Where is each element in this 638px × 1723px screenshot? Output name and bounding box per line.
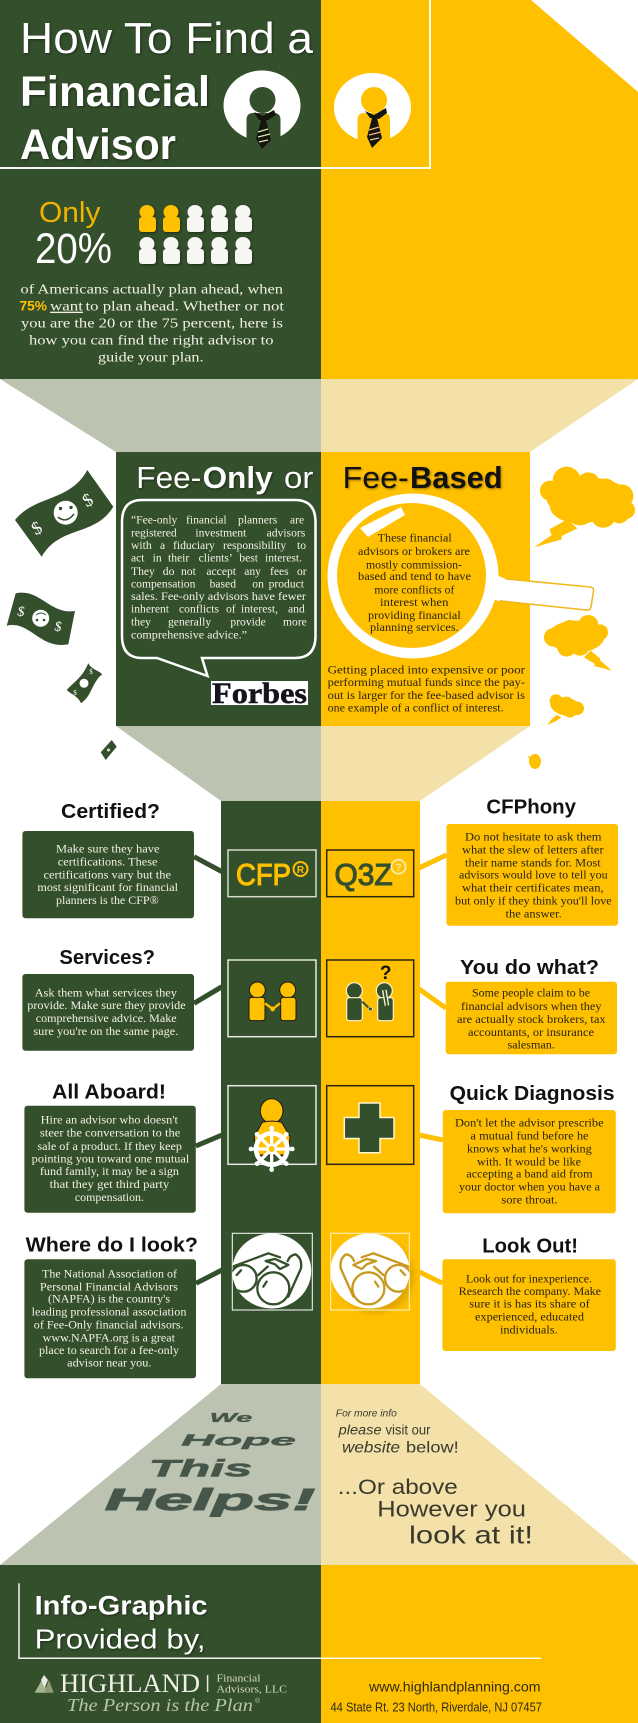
speech bubble with quote: interest, xyxy=(241,603,278,616)
text block: intro paragraph: 75% xyxy=(20,299,47,314)
speech bubble with quote: in xyxy=(153,552,162,565)
callout: look out: sure it is has its share of xyxy=(469,1298,590,1311)
speech bubble with quote: of xyxy=(226,603,236,616)
speech bubble with quote: sales. Fee-only advisors have fewer xyxy=(131,590,306,603)
speech bubble with quote: fees xyxy=(270,565,289,578)
speech bubble with quote: with xyxy=(131,539,152,552)
icon: confused client and advisor: ? xyxy=(380,963,392,984)
heading: certified: Certified? xyxy=(61,800,160,823)
speech bubble with quote xyxy=(122,500,316,676)
icon: binoculars on green xyxy=(230,1233,312,1310)
speech bubble with quote: more xyxy=(283,616,307,629)
icon: medium storm cloud xyxy=(544,615,612,671)
speech bubble with quote: responsibility xyxy=(223,539,286,552)
title: Advisor xyxy=(20,121,176,169)
callout: you do what: accountants, or insurance xyxy=(468,1026,594,1039)
speech bubble with quote: based xyxy=(210,578,236,591)
callout: look out: experienced, educated xyxy=(475,1311,584,1324)
speech bubble with quote: financial xyxy=(186,513,227,526)
speech bubble with quote: conflicts xyxy=(179,603,219,616)
panel: central column xyxy=(221,801,420,1384)
icon: person at ship's wheel xyxy=(228,1086,316,1172)
icon: large storm cloud xyxy=(534,467,635,547)
icon: Q3Z fake mark xyxy=(327,850,414,897)
icon: magnifying glass with definition: interest when xyxy=(380,596,449,609)
callout: services: Ask them what services they xyxy=(35,987,177,1000)
speech bubble with quote: and xyxy=(288,603,305,616)
speech bubble with quote: their xyxy=(168,552,189,565)
icon: medium money bill xyxy=(7,593,75,645)
callout: CFPhony xyxy=(419,824,618,926)
panel: fee-only vs fee-based xyxy=(116,452,530,726)
icon: CFP mark: CFP xyxy=(236,857,291,892)
text block: visit website: visit our xyxy=(386,1421,431,1437)
icon: magnifying glass with definition: more conflicts of xyxy=(374,583,455,596)
speech bubble with quote: act xyxy=(131,552,145,565)
text block: conflict of interest example: one example of a conflict of interest. xyxy=(328,702,504,715)
callout: where do I look: advisor near you. xyxy=(67,1357,152,1370)
icon: small money bill: $ xyxy=(73,689,77,697)
speech bubble with quote: accept xyxy=(206,565,237,578)
speech bubble with quote: inherent xyxy=(131,603,170,616)
speech bubble with quote: on xyxy=(252,578,264,591)
callout: CFPhony: advisors would love to tell you xyxy=(459,869,608,882)
text block: we hope this helps: This xyxy=(149,1456,252,1483)
callout: quick diagnosis: a mutual fund before he xyxy=(470,1129,588,1142)
callout: where do I look: place to search for a fee-only xyxy=(39,1344,179,1357)
funnel: middle connector xyxy=(116,726,530,801)
title: Financial xyxy=(20,68,210,116)
speech bubble with quote: are xyxy=(290,513,304,526)
text block: we hope this helps: Hope xyxy=(181,1433,296,1450)
icon: magnifying glass with definition: based and tend to have xyxy=(358,570,471,583)
text block: conflict of interest example: out is larger for the fee-based advisor is xyxy=(328,689,526,702)
icon: magnifying glass with definition xyxy=(328,494,594,658)
callout: where do I look: The National Association of xyxy=(42,1267,177,1280)
icon: magnifying glass with definition: advisors or brokers are xyxy=(358,545,470,558)
text block: visit website: For more info xyxy=(336,1409,397,1420)
text block: intro paragraph: guide your plan. xyxy=(98,350,204,365)
callout: look out xyxy=(419,1259,616,1351)
callout: services: comprehensive advice. Make xyxy=(36,1012,177,1025)
icon: magnifying glass with definition: mostly commission- xyxy=(366,558,462,571)
text block: visit website: website xyxy=(342,1440,400,1457)
callout: where do I look: www.NAPFA.org is a great xyxy=(43,1332,176,1345)
icon: Q3Z fake mark: Q3Z xyxy=(334,857,393,892)
icon: advisor silhouette on green xyxy=(224,70,300,150)
callout: CFPhony: what the slew of letters after xyxy=(462,844,604,857)
callout: you do what: salesman. xyxy=(508,1038,555,1051)
heading: quick diagnosis: Quick Diagnosis xyxy=(450,1082,615,1105)
heading: fee-based: Based xyxy=(410,460,503,495)
callout: CFPhony: but only if they think you'll love xyxy=(455,895,612,908)
icon: Q3Z fake mark: ? xyxy=(395,862,402,874)
callout: all aboard: Hire an advisor who doesn't xyxy=(41,1113,179,1126)
title xyxy=(20,14,314,169)
icon: small money bill: $ xyxy=(89,668,93,676)
icon: tiny money bill xyxy=(101,740,117,760)
speech bubble with quote: not xyxy=(181,565,197,578)
text block: intro paragraph: want xyxy=(50,299,83,314)
icon: tiny storm cloud xyxy=(527,754,541,769)
speech bubble with quote: “Fee-only xyxy=(131,513,178,526)
callout: you do what: are actually stock brokers, tax xyxy=(457,1013,606,1026)
speech bubble with quote: any xyxy=(244,565,261,578)
text block: we hope this helps: We xyxy=(210,1410,252,1425)
speech bubble with quote: investment xyxy=(195,527,247,540)
icon: binoculars on yellow xyxy=(330,1233,414,1313)
speech bubble with quote: best xyxy=(239,552,259,565)
icon: advisor silhouette on yellow xyxy=(334,73,411,150)
icon: large smiling money bill xyxy=(15,470,113,557)
tagline: ® xyxy=(255,1697,261,1705)
speech bubble with quote: interest. xyxy=(265,552,302,565)
heading: all aboard: All Aboard! xyxy=(52,1080,166,1103)
text block: visit website: please xyxy=(338,1421,382,1437)
contact: address: 44 State Rt. 23 North, Riverdale, NJ 07457 xyxy=(330,1701,542,1715)
icon: ten people, two highlighted xyxy=(139,205,252,264)
callout: where do I look: leading professional association xyxy=(32,1306,187,1319)
callout: certified: Make sure they have xyxy=(56,843,160,856)
heading: fee-based xyxy=(343,460,503,495)
callout: quick diagnosis: with. It would be like xyxy=(477,1155,581,1168)
logo: Highland Financial Advisors xyxy=(35,1669,287,1698)
callout: services: sure you're on the same page. xyxy=(33,1025,178,1038)
speech bubble with quote: registered xyxy=(131,527,177,540)
text block: visit website xyxy=(336,1409,459,1457)
callout: quick diagnosis xyxy=(419,1110,616,1213)
callout: all aboard xyxy=(24,1106,222,1213)
speech bubble with quote: product xyxy=(269,578,305,591)
icon: handshake xyxy=(228,960,316,1037)
heading: where do I look: Where do I look? xyxy=(26,1234,198,1257)
logo: Highland Financial Advisors: Advisors, LLC xyxy=(216,1684,287,1695)
callout: quick diagnosis: Don't let the advisor prescribe xyxy=(455,1117,604,1130)
speech bubble with quote: a xyxy=(160,539,165,552)
icon: medical cross xyxy=(327,1086,414,1164)
text block: conflict of interest example: performing mutual funds since the pay- xyxy=(328,676,525,689)
text block: we hope this helps: Helps! xyxy=(105,1482,315,1517)
callout: certified: most significant for financial xyxy=(37,881,178,894)
panel: footer background xyxy=(0,1565,638,1723)
text block: or above: However you xyxy=(377,1497,526,1522)
callout: quick diagnosis: sore throat. xyxy=(501,1194,558,1207)
heading: info-graphic provided by xyxy=(35,1590,208,1654)
icon: magnifying glass with definition: These financial xyxy=(378,532,452,545)
speech bubble with quote: or xyxy=(297,565,307,578)
panel: header background xyxy=(0,0,638,379)
heading: info-graphic provided by: Info-Graphic xyxy=(35,1590,208,1620)
speech bubble with quote: do xyxy=(163,565,175,578)
icon: confused client and advisor xyxy=(327,960,414,1037)
callout: where do I look xyxy=(24,1259,222,1378)
callout: certified: planners is the CFP® xyxy=(56,894,159,907)
speech bubble with quote: to xyxy=(297,539,306,552)
speech bubble with quote: advisors xyxy=(267,527,306,540)
heading: fee-only or: or xyxy=(284,460,313,495)
speech bubble with quote: generally xyxy=(168,616,211,629)
heading: fee-only or: Fee- xyxy=(136,460,201,495)
funnel: upper connector xyxy=(0,379,638,452)
speech bubble with quote: clients’ xyxy=(199,552,233,565)
text block: intro paragraph: how you can find the right advisor to xyxy=(29,333,274,348)
text block: or above: ...Or above xyxy=(338,1476,458,1499)
text block: conflict of interest example: Getting placed into expensive or poor xyxy=(328,663,525,676)
heading: info-graphic provided by: Provided by, xyxy=(35,1623,206,1654)
icon: small storm cloud xyxy=(547,694,584,725)
callout: where do I look: Personal Financial Advisors xyxy=(40,1280,178,1293)
callout: look out: individuals. xyxy=(500,1323,558,1336)
speech bubble with quote: fiduciary xyxy=(173,539,215,552)
callout: quick diagnosis: your doctor when you have a xyxy=(459,1181,600,1194)
heading: CFPhony: CFPhony xyxy=(486,795,577,818)
callout: certified: certifications. These xyxy=(58,856,157,869)
heading: fee-only or xyxy=(136,460,313,495)
icon: magnifying glass with definition: planning services. xyxy=(370,621,459,634)
text block: intro paragraph: to plan ahead. Whether or not xyxy=(86,299,284,314)
icon: medium money bill: $ xyxy=(16,604,26,621)
funnel: lower trapezoid xyxy=(0,1384,638,1565)
callout: CFPhony: what their certificates mean, xyxy=(462,882,604,895)
logo: Highland Financial Advisors: Financial xyxy=(216,1674,261,1685)
callout: look out: Research the company. Make xyxy=(459,1285,601,1298)
logo: Highland Financial Advisors: HIGHLAND xyxy=(60,1669,200,1698)
callout: look out: Look out for inexperience. xyxy=(466,1273,592,1286)
text block: intro paragraph: of Americans actually plan ahead, when xyxy=(20,281,283,296)
contact: website: www.highlandplanning.com xyxy=(368,1679,540,1695)
icon: large smiling money bill: $ xyxy=(28,517,46,539)
callout: certified: certifications vary but the xyxy=(44,869,171,882)
icon: small money bill xyxy=(67,663,102,703)
text block: visit website: below! xyxy=(406,1440,459,1457)
heading: fee-based: Fee- xyxy=(343,460,409,495)
speech bubble with quote: they xyxy=(131,616,151,629)
icon: magnifying glass with definition: providing financial xyxy=(368,609,461,622)
callout: all aboard: fund family, it may be a sign xyxy=(40,1165,179,1178)
callout: where do I look: of Fee-Only financial advisors. xyxy=(34,1319,184,1332)
callout: CFPhony: Do not hesitate to ask them xyxy=(465,831,602,844)
callout: you do what xyxy=(419,982,617,1054)
text block: conflict of interest example xyxy=(328,663,526,715)
icon: medium money bill: $ xyxy=(53,619,63,636)
callout: all aboard: pointing you toward one mutual xyxy=(32,1153,189,1166)
callout: services xyxy=(22,974,222,1051)
speech bubble with quote: provide xyxy=(230,616,266,629)
callout: quick diagnosis: accepting a band aid from xyxy=(466,1168,593,1181)
tagline: The Person is the Plan xyxy=(67,1695,253,1715)
stat: only 20%: 20% xyxy=(35,225,112,273)
icon: CFP mark xyxy=(228,850,316,897)
stat: only 20% xyxy=(35,197,112,273)
callout: all aboard: compensation. xyxy=(75,1191,144,1204)
heading: you do what: You do what? xyxy=(460,956,599,979)
text block: or above xyxy=(338,1476,533,1549)
callout: CFPhony: the answer. xyxy=(506,908,562,921)
callout: quick diagnosis: knows what he's working xyxy=(467,1143,592,1156)
callout: you do what: Some people claim to be xyxy=(472,987,590,1000)
callout: certified xyxy=(22,831,222,918)
stat: only 20%: Only xyxy=(39,197,101,229)
icon: CFP mark: R xyxy=(297,865,305,876)
heading: services: Services? xyxy=(59,946,155,969)
callout: all aboard: sale of a product. If they keep xyxy=(37,1140,182,1153)
callout: you do what: financial advisors when they xyxy=(461,1000,602,1013)
callout: where do I look: (NAPFA) is the country's xyxy=(48,1293,171,1306)
callout: all aboard: that they get third party xyxy=(50,1178,170,1191)
logo: Forbes: Forbes xyxy=(212,677,307,710)
speech bubble with quote: planners xyxy=(238,513,278,526)
speech bubble with quote: comprehensive advice.” xyxy=(131,629,247,642)
text block: intro paragraph xyxy=(20,281,284,365)
callout: all aboard: steer the conversation to the xyxy=(40,1127,180,1140)
text block: we hope this helps xyxy=(105,1410,315,1517)
callout: services: provide. Make sure they provide xyxy=(27,999,186,1012)
text block: intro paragraph: you are the 20 or the 75 percent, here is xyxy=(21,316,283,331)
speech bubble with quote: compensation xyxy=(131,578,196,591)
heading: look out: Look Out! xyxy=(482,1235,578,1258)
text block: or above: look at it! xyxy=(409,1521,533,1549)
title: How To Find a xyxy=(20,14,314,63)
speech bubble with quote: They xyxy=(131,565,155,578)
icon: large smiling money bill: $ xyxy=(79,489,97,511)
callout: CFPhony: their name stands for. Most xyxy=(465,857,602,870)
heading: fee-only or: Only xyxy=(203,460,273,495)
